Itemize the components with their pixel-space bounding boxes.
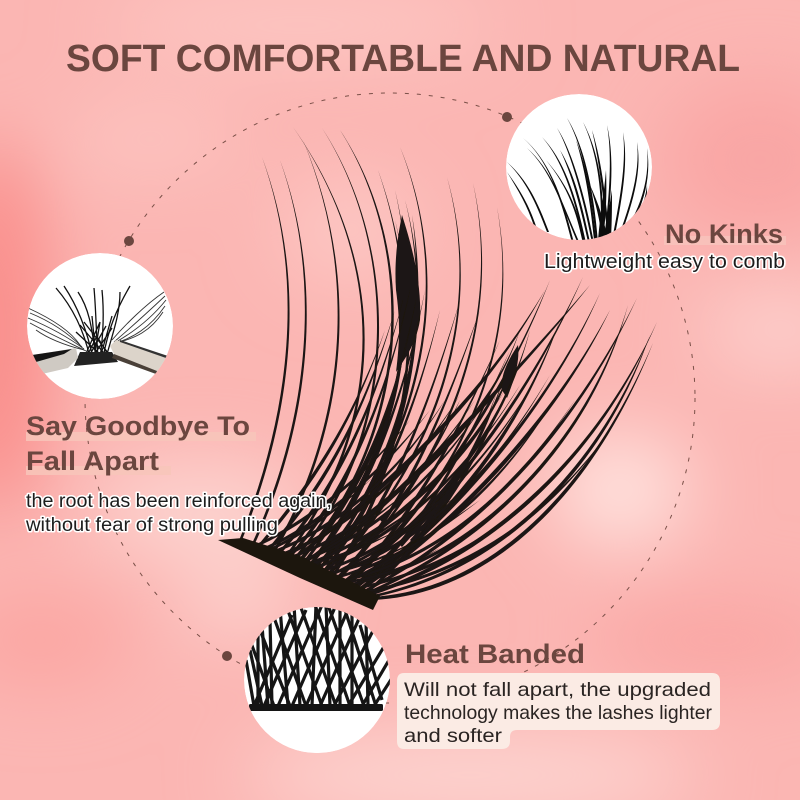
inset photo: tweezers on lash root bbox=[27, 253, 173, 399]
title: SOFT COMFORTABLE AND NATURAL bbox=[66, 38, 740, 80]
dense clump right bbox=[502, 345, 518, 398]
text block: upgraded technology bbox=[397, 673, 720, 749]
connector dot bbox=[222, 651, 232, 661]
detail: heat banded bbox=[222, 605, 720, 761]
inset photo: heat band close-up bbox=[244, 607, 390, 753]
text: root reinforced: without fear of strong pulling bbox=[25, 515, 278, 536]
text block: upgraded technology: Will not fall apart, the upgraded bbox=[404, 679, 711, 701]
shallow crossing lashes bbox=[250, 420, 410, 549]
text: lightweight: Lightweight easy to comb bbox=[544, 251, 785, 273]
lash band bbox=[218, 538, 380, 610]
heading: say goodbye to fall apart: Say Goodbye To bbox=[26, 411, 250, 441]
steep crossing lashes bbox=[255, 330, 385, 551]
detail: say goodbye to fall apart bbox=[25, 236, 332, 536]
connector dot bbox=[502, 112, 512, 122]
text block: upgraded technology: and softer bbox=[404, 725, 503, 747]
short root lashes bbox=[262, 478, 372, 554]
dashed circle connector bbox=[85, 93, 695, 703]
heading: heat banded: Heat Banded bbox=[405, 639, 585, 669]
text block: upgraded technology: technology makes the lashes lighter bbox=[404, 702, 712, 724]
connector dot bbox=[124, 236, 134, 246]
text: root reinforced: the root has been reinforced again, bbox=[26, 491, 332, 512]
heading: say goodbye to fall apart bbox=[26, 411, 256, 476]
inset photo: lash tips bbox=[506, 94, 652, 244]
dense clump upper bbox=[395, 215, 420, 372]
heading: No Kinks: No Kinks bbox=[665, 219, 783, 249]
main lash cluster illustration bbox=[218, 127, 657, 610]
text: root reinforced bbox=[25, 491, 332, 536]
heading: say goodbye to fall apart: Fall Apart bbox=[26, 446, 159, 476]
detail: no kinks bbox=[502, 94, 786, 273]
